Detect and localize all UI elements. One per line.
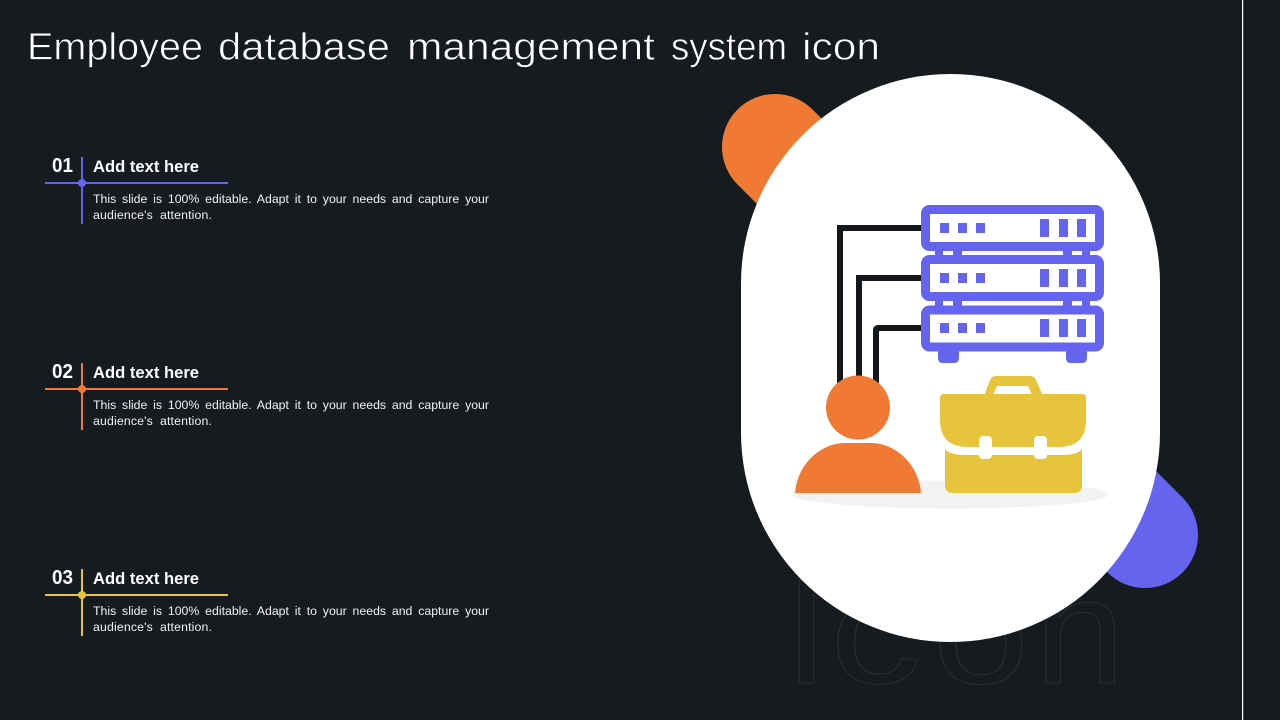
title: management xyxy=(407,26,655,68)
body text 03 xyxy=(93,603,493,637)
marker lines 01 xyxy=(45,157,228,224)
watermark word: c xyxy=(830,547,922,715)
watermark word: o xyxy=(933,547,1029,715)
illustration: employee database xyxy=(792,210,1108,508)
number 03: 03 xyxy=(52,567,73,589)
title: icon xyxy=(802,26,880,68)
body text 03: audience's attention. xyxy=(93,620,212,634)
body text 02: audience's attention. xyxy=(93,414,212,428)
marker lines 03 xyxy=(45,569,228,636)
body text 02: This slide is 100% editable. Adapt it to your needs and capture your xyxy=(93,398,489,412)
watermark word: n xyxy=(1035,547,1125,715)
body text 03: This slide is 100% editable. Adapt it to your needs and capture your xyxy=(93,604,489,618)
ground shadow xyxy=(792,480,1108,508)
title: Employee xyxy=(27,26,203,68)
icon: server rack xyxy=(926,210,1100,363)
body text 01 xyxy=(93,191,493,225)
marker lines 02 xyxy=(45,363,228,430)
title: database xyxy=(218,26,390,68)
list item 01 xyxy=(45,155,493,225)
list item 03 xyxy=(45,567,493,637)
title: system xyxy=(671,26,787,68)
heading 02: Add text here xyxy=(93,364,199,382)
heading 03: Add text here xyxy=(93,570,199,588)
watermark word: I xyxy=(785,547,828,715)
body text 01: This slide is 100% editable. Adapt it to your needs and capture your xyxy=(93,192,489,206)
connector wires xyxy=(840,228,925,385)
number 02: 02 xyxy=(52,361,73,383)
white rounded panel xyxy=(741,74,1160,642)
decorative orange blob xyxy=(775,147,900,272)
heading 01: Add text here xyxy=(93,158,199,176)
decorative blue blob xyxy=(1000,390,1145,535)
icon: person xyxy=(795,376,921,493)
list item 02 xyxy=(45,361,493,431)
number 01: 01 xyxy=(52,155,73,177)
icon: briefcase xyxy=(940,376,1086,493)
watermark word xyxy=(785,547,1125,715)
body text 01: audience's attention. xyxy=(93,208,212,222)
body text 02 xyxy=(93,397,493,431)
title xyxy=(27,26,880,68)
